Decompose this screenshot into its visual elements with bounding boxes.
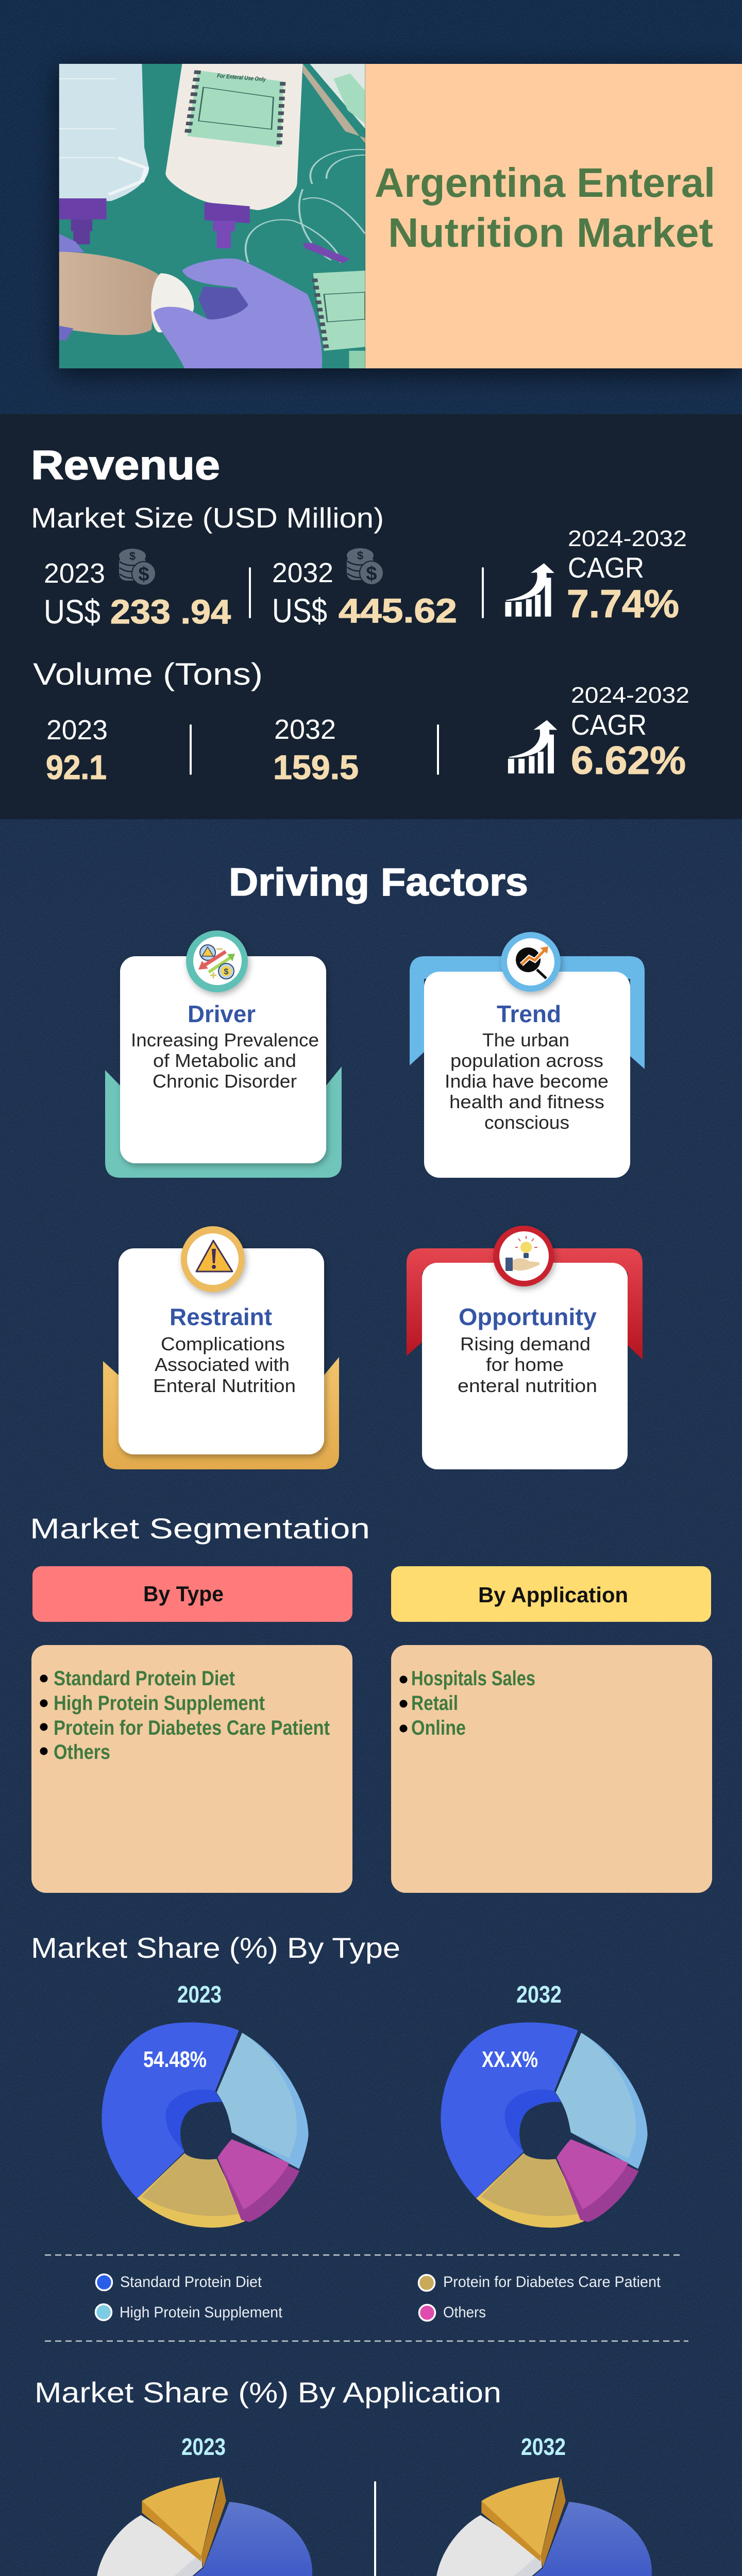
segment list: Hospitals Sales	[411, 1667, 535, 1690]
legend: type: Standard Protein Diet	[120, 2274, 262, 2291]
icon: coins 2023	[119, 549, 156, 585]
stat: 2032 market size: 2032	[272, 557, 333, 588]
card text: Rising demand	[460, 1333, 591, 1354]
chart: type donut 2023: 2023	[177, 1981, 222, 2008]
card text	[131, 1029, 319, 1092]
chart: type donut 2032: 2032	[516, 1981, 562, 2008]
icon: coins 2032: $	[366, 563, 377, 585]
icon: restraint	[181, 1226, 245, 1292]
panel: by type	[31, 1566, 352, 1893]
segment list: Retail	[411, 1692, 458, 1715]
segment list	[31, 1645, 352, 1893]
card text	[458, 1333, 597, 1396]
divider	[482, 567, 484, 618]
divider	[190, 724, 192, 775]
card text: Increasing Prevalence	[131, 1029, 319, 1050]
title: Argentina Enteral Nutrition Market: Nutrition Market	[388, 210, 713, 256]
legend: type: Protein for Diabetes Care Patient	[443, 2274, 661, 2291]
stat: 2032 market size: US$	[272, 591, 327, 630]
stat: 2032 market size	[272, 557, 457, 630]
heading: market size: Market Size (USD Million)	[31, 502, 384, 534]
icon: driver: $	[224, 968, 229, 976]
button label: By Type	[143, 1582, 224, 1606]
stat: 2023 volume: 2023	[46, 715, 108, 745]
icon: driver	[186, 930, 248, 992]
heading: Revenue: Revenue	[31, 442, 220, 488]
legend: type	[96, 2274, 661, 2321]
card title: Driver	[188, 1001, 256, 1027]
divider	[249, 567, 251, 618]
card text: Enteral Nutrition	[153, 1375, 296, 1396]
card: driver	[105, 930, 342, 1178]
stat: revenue CAGR: 7.74%	[567, 582, 679, 626]
heading: Market Segmentation: Market Segmentation	[30, 1512, 370, 1545]
segment list: Protein for Diabetes Care Patient	[54, 1717, 330, 1739]
photo: enteral feeding bottles and gloved hand	[59, 64, 365, 368]
icon: opportunity	[493, 1226, 554, 1286]
stat: 2032 volume: 159.5	[273, 748, 359, 786]
photo: enteral feeding bottles and gloved hand: For Enteral Use Only	[216, 73, 266, 83]
stat: volume CAGR: 6.62%	[571, 739, 686, 783]
stat: 2032 volume	[273, 714, 359, 786]
stat: 2023 market size	[44, 558, 231, 631]
icon: coins 2023: $	[129, 550, 136, 563]
card text: Chronic Disorder	[153, 1071, 297, 1092]
icon: coins 2023: $	[138, 564, 149, 585]
stat: 2032 market size: 445.62	[339, 591, 457, 630]
stat: 2032 volume: 2032	[274, 714, 336, 745]
divider	[374, 2481, 376, 2576]
card text: of Metabolic and	[153, 1050, 296, 1071]
heading: Market Share By Type: Market Share (%) By Type	[31, 1931, 400, 1964]
card title: Trend	[497, 1001, 561, 1027]
chart: application pie 2032	[435, 2433, 653, 2576]
panel: revenue	[0, 414, 742, 819]
legend: type: Others	[443, 2304, 486, 2321]
card text	[445, 1029, 609, 1133]
stat: 2023 volume	[46, 715, 108, 786]
stat: volume CAGR	[571, 683, 689, 783]
card title: Restraint	[170, 1303, 272, 1330]
card text: conscious	[484, 1112, 569, 1133]
chart: type donut 2023: 54.48%	[143, 2047, 207, 2072]
panel: by application	[391, 1566, 712, 1893]
chart: type donut 2023	[102, 1981, 309, 2228]
icon: coins 2032: $	[357, 549, 363, 562]
chart: application pie 2032: 2032	[521, 2433, 566, 2460]
title panel	[365, 64, 742, 368]
title: Argentina Enteral Nutrition Market	[375, 160, 715, 256]
segment list: Online	[411, 1717, 466, 1739]
stat: revenue CAGR: CAGR	[568, 551, 644, 584]
chart: application pie 2023	[96, 2433, 313, 2576]
card title: Opportunity	[459, 1303, 597, 1330]
card text: population across	[450, 1050, 603, 1071]
segment list: Standard Protein Diet	[54, 1667, 235, 1690]
heading: volume: Volume (Tons)	[33, 657, 263, 691]
header banner	[59, 64, 742, 368]
stat: 2023 volume: 92.1	[46, 748, 107, 786]
button label: By Application	[478, 1583, 628, 1607]
segment list: Others	[54, 1741, 110, 1764]
card text: enteral nutrition	[458, 1375, 597, 1396]
chart: type donut 2032	[441, 1981, 648, 2228]
stat: 2023 market size: 233 .94	[110, 592, 231, 631]
chart: type donut 2032: XX.X%	[482, 2047, 538, 2072]
heading: Market Share By Application: Market Share (%) By Application	[35, 2376, 501, 2409]
card text: Associated with	[155, 1354, 290, 1375]
icon: growth chart	[505, 563, 554, 617]
heading: Driving Factors: Driving Factors	[229, 860, 528, 904]
card text: for home	[486, 1354, 564, 1375]
card: opportunity	[407, 1226, 643, 1469]
stat: revenue CAGR	[567, 526, 687, 626]
stat: 2023 market size: 2023	[44, 558, 105, 589]
stat: revenue CAGR: 2024-2032	[568, 526, 687, 551]
stat: volume CAGR: CAGR	[571, 708, 647, 741]
divider	[437, 724, 439, 775]
title: Argentina Enteral Nutrition Market: Argentina Enteral	[375, 160, 715, 206]
icon: growth chart	[508, 720, 557, 773]
card text: health and fitness	[449, 1091, 604, 1112]
card: trend	[410, 932, 645, 1178]
icon: trend	[501, 932, 561, 992]
card text: The urban	[482, 1029, 569, 1050]
stat: 2023 market size: US$	[44, 592, 100, 631]
card text	[153, 1333, 296, 1396]
card text: India have become	[445, 1071, 609, 1092]
legend: type: High Protein Supplement	[120, 2304, 283, 2321]
segment list: High Protein Supplement	[54, 1692, 265, 1715]
stat: volume CAGR: 2024-2032	[571, 683, 689, 708]
chart: application pie 2023: 2023	[181, 2433, 226, 2460]
card text: Complications	[161, 1333, 285, 1354]
card: restraint	[103, 1226, 339, 1469]
segment list	[391, 1645, 712, 1893]
icon: coins 2032	[347, 548, 383, 585]
